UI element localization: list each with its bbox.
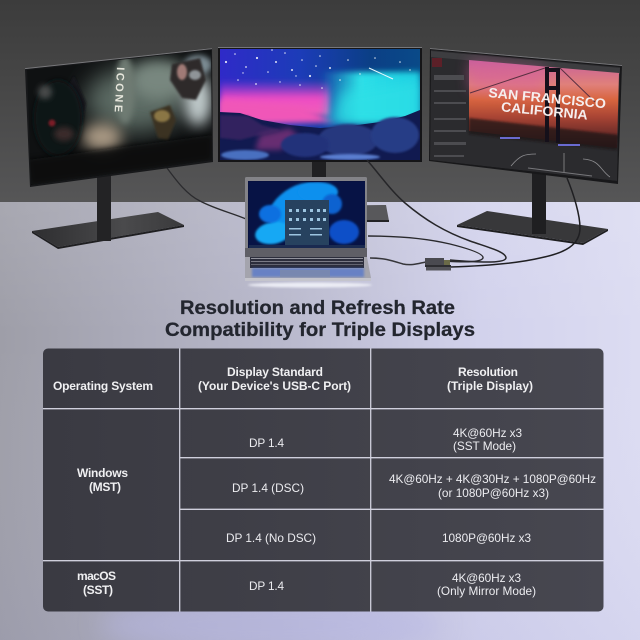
cable: right monitor to adapter <box>450 178 580 267</box>
resolution column: 4K@60Hz x3 <box>452 571 521 585</box>
game artwork sign text: ICONE <box>112 67 126 112</box>
title <box>165 298 475 341</box>
display standard column: DP 1.4 (No DSC) <box>226 531 316 545</box>
editor side panel controls <box>434 75 466 157</box>
display standard column: DP 1.4 <box>249 579 284 593</box>
table header row: (Your Device's USB-C Port) <box>198 379 351 393</box>
center monitor <box>218 47 422 162</box>
cable: laptop HDMI to adapter <box>368 236 483 262</box>
left monitor <box>25 48 213 187</box>
wallpaper bloom <box>254 182 360 245</box>
cable: center monitor to adapter <box>367 160 506 262</box>
display standard column <box>226 436 316 593</box>
left monitor stand and base <box>32 176 184 249</box>
table header row: Operating System <box>53 379 153 393</box>
resolution column: (or 1080P@60Hz x3) <box>438 486 549 500</box>
start menu panel <box>285 200 329 246</box>
operating system column <box>77 466 128 597</box>
bridge tower <box>470 67 595 143</box>
center monitor stand and base <box>300 161 389 222</box>
operating system column: (SST) <box>83 583 113 597</box>
video title text: SAN FRANCISCO <box>488 85 607 111</box>
video title text: CALIFORNIA <box>500 99 589 123</box>
table header row: Display Standard <box>227 365 323 379</box>
display standard column: DP 1.4 <box>249 436 284 450</box>
title: Compatibility for Triple Displays <box>165 320 475 341</box>
resolution column: (Only Mirror Mode) <box>437 584 536 598</box>
display standard column: DP 1.4 (DSC) <box>232 481 304 495</box>
laptop keyboard <box>250 257 364 268</box>
video title text <box>488 88 606 120</box>
cable: left monitor to laptop <box>167 168 246 219</box>
resolution column: (SST Mode) <box>453 439 516 453</box>
resolution column <box>389 426 596 598</box>
desk surface background <box>0 202 640 640</box>
table header row <box>53 365 533 393</box>
title: Resolution and Refresh Rate <box>180 298 455 319</box>
table header row: Resolution <box>458 365 518 379</box>
compatibility table <box>43 348 604 612</box>
cable: laptop USB-C to adapter <box>370 258 426 265</box>
operating system column: Windows <box>77 466 128 480</box>
USB-C adapter <box>425 258 451 270</box>
resolution column: 1080P@60Hz x3 <box>442 531 531 545</box>
wall background <box>0 0 640 203</box>
operating system column: macOS <box>77 569 116 583</box>
editor timeline curves <box>511 154 536 166</box>
laptop deck <box>245 257 371 281</box>
right monitor <box>429 48 622 184</box>
resolution column: 4K@60Hz x3 <box>453 426 522 440</box>
operating system column: (MST) <box>89 480 121 494</box>
laptop hinge band <box>245 248 367 257</box>
right monitor stand and base <box>457 172 608 245</box>
laptop <box>245 174 371 281</box>
table header row: (Triple Display) <box>447 379 533 393</box>
resolution column: 4K@60Hz + 4K@30Hz + 1080P@60Hz <box>389 472 596 486</box>
